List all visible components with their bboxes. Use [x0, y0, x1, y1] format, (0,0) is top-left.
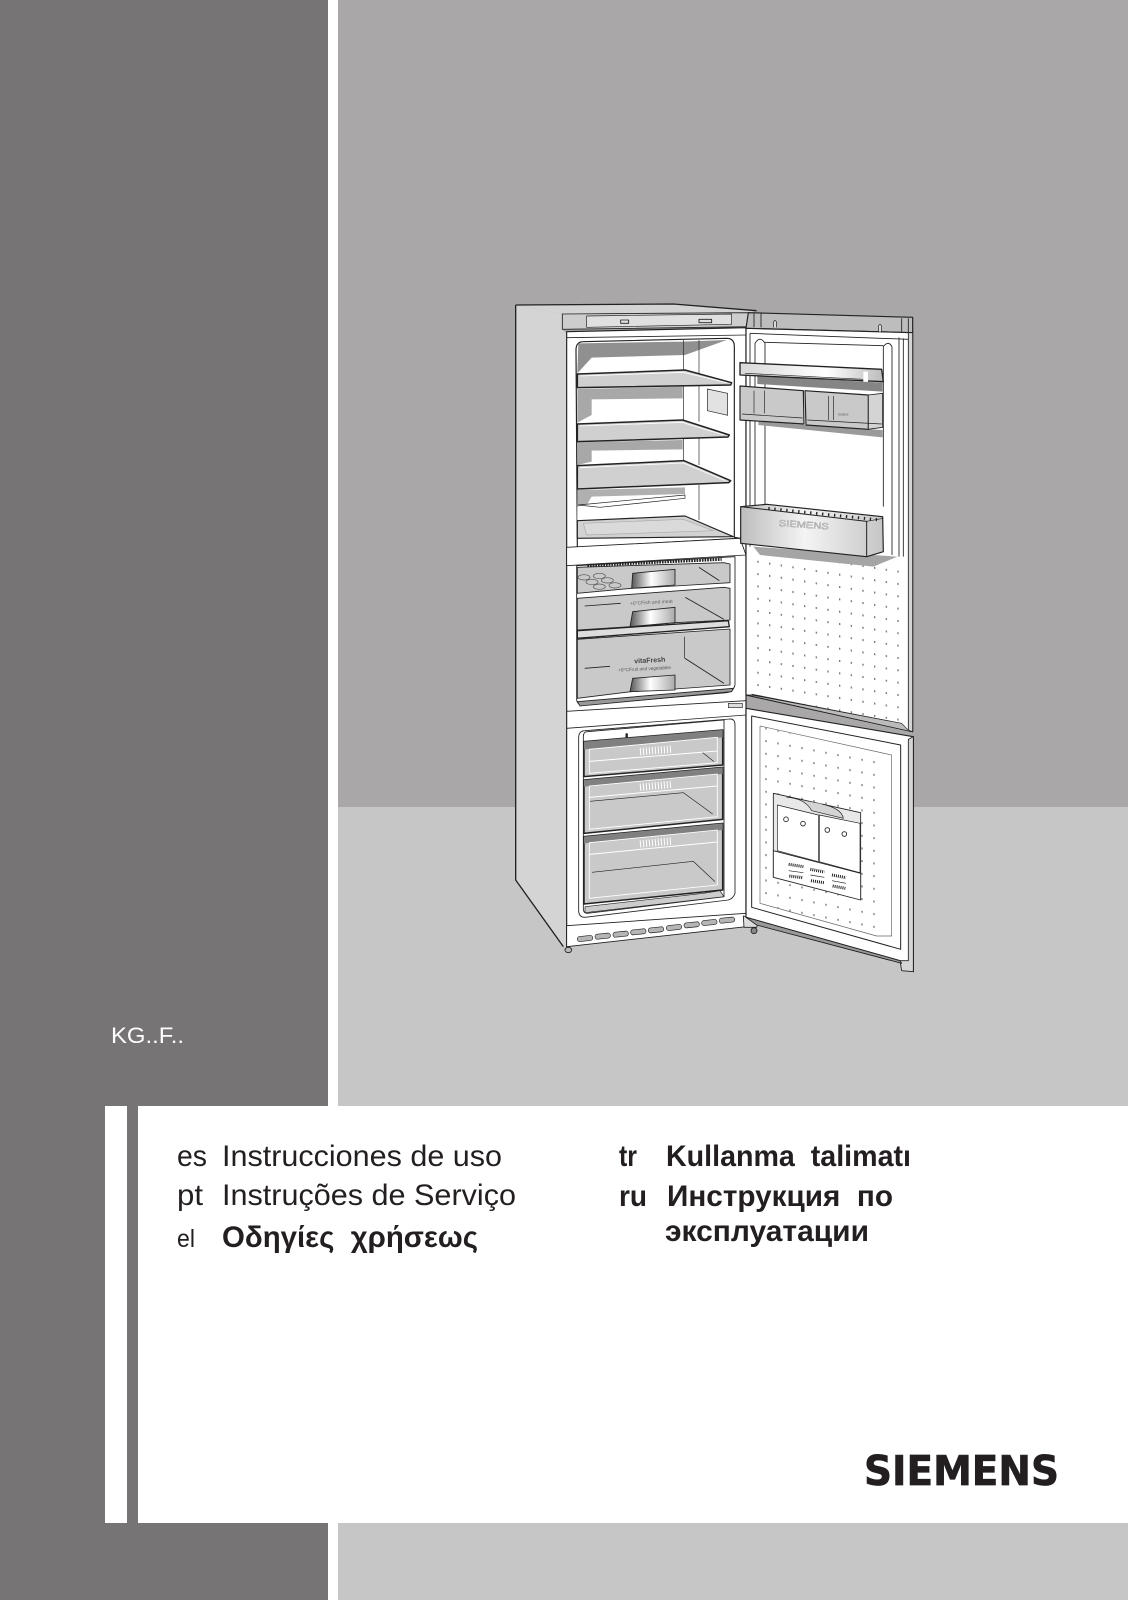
Turkish title: Kullanma talimatı — [666, 1140, 911, 1173]
glass shelf 2 — [577, 420, 729, 442]
el: el — [177, 1225, 195, 1253]
panel: bottom grey strip — [338, 1523, 1128, 1600]
panel: white title band — [105, 1106, 1128, 1523]
sticker — [707, 389, 728, 415]
freezer frame — [579, 719, 735, 917]
crisper cover — [577, 516, 733, 538]
freezer drawer 1 — [584, 730, 723, 777]
cabinet foot — [565, 947, 572, 953]
door bin — [741, 504, 883, 557]
illustration: open fridge-freezer — [516, 304, 913, 972]
panel: dark left column — [0, 0, 328, 1600]
hinge label — [728, 703, 742, 708]
drawer 3: vitaFresh — [634, 657, 665, 665]
drawer 2: +0°CFish and meat — [630, 599, 674, 607]
cold pack right — [819, 815, 860, 873]
panel: upper grey wall — [338, 0, 1128, 807]
languages, left column — [177, 1140, 516, 1254]
freezer drawer 3 — [584, 823, 723, 904]
freezer accumulator holder — [773, 793, 861, 900]
dotted panel upper door — [752, 557, 900, 723]
Russian title line 1: Инструкция по — [667, 1180, 893, 1213]
languages, right column — [619, 1140, 911, 1248]
panel: floor — [338, 807, 1128, 1106]
freezer drawer 2 — [584, 767, 723, 833]
drawer 3 — [577, 629, 730, 698]
door hinge and foot — [743, 916, 759, 934]
door tray top — [740, 363, 883, 392]
pictogram label panel — [773, 851, 861, 900]
door box shadow — [758, 422, 883, 437]
door bin shadow — [753, 547, 897, 567]
glass shelf 3 — [577, 461, 731, 489]
Spanish title: Instrucciones de uso — [222, 1140, 502, 1173]
upper door — [740, 313, 913, 732]
cabinet front — [567, 328, 746, 947]
Greek title: Οδηγίες χρήσεως — [222, 1221, 478, 1254]
Russian title line 2: эксплуатации — [665, 1215, 869, 1248]
door bin: SIEMENS — [779, 518, 829, 531]
cabinet side panel — [516, 305, 567, 947]
crisper compartment — [577, 557, 735, 706]
tr: tr — [619, 1140, 637, 1173]
drawer 3: +0°CFruit and vegetables — [618, 665, 672, 673]
kick plate — [567, 913, 746, 947]
label: model code: KG..F.. — [111, 1023, 184, 1048]
door box right — [805, 391, 883, 429]
es: es — [177, 1140, 207, 1173]
bottle shelf — [578, 495, 685, 507]
door box left — [740, 386, 804, 424]
lower section, second coordinate origin — [565, 701, 913, 972]
pt: pt — [177, 1179, 203, 1212]
door box right: SIEMENS — [838, 414, 849, 416]
cabinet top — [516, 304, 757, 314]
drawer 2 — [577, 587, 730, 630]
ru: ru — [619, 1180, 647, 1213]
logo: SIEMENS: SIEMENS — [864, 1447, 1059, 1495]
door inner liner with dots — [760, 726, 877, 935]
glass shelf 1 — [577, 370, 732, 388]
cold pack left — [777, 805, 818, 862]
door liner rails — [750, 333, 908, 557]
drawer separator — [577, 621, 729, 638]
divider band — [567, 538, 746, 566]
fridge compartment — [576, 338, 740, 547]
drawer 1 — [577, 563, 730, 593]
control panel — [562, 313, 748, 338]
Portuguese title: Instruções de Serviço — [222, 1179, 516, 1212]
lower door — [746, 708, 913, 972]
